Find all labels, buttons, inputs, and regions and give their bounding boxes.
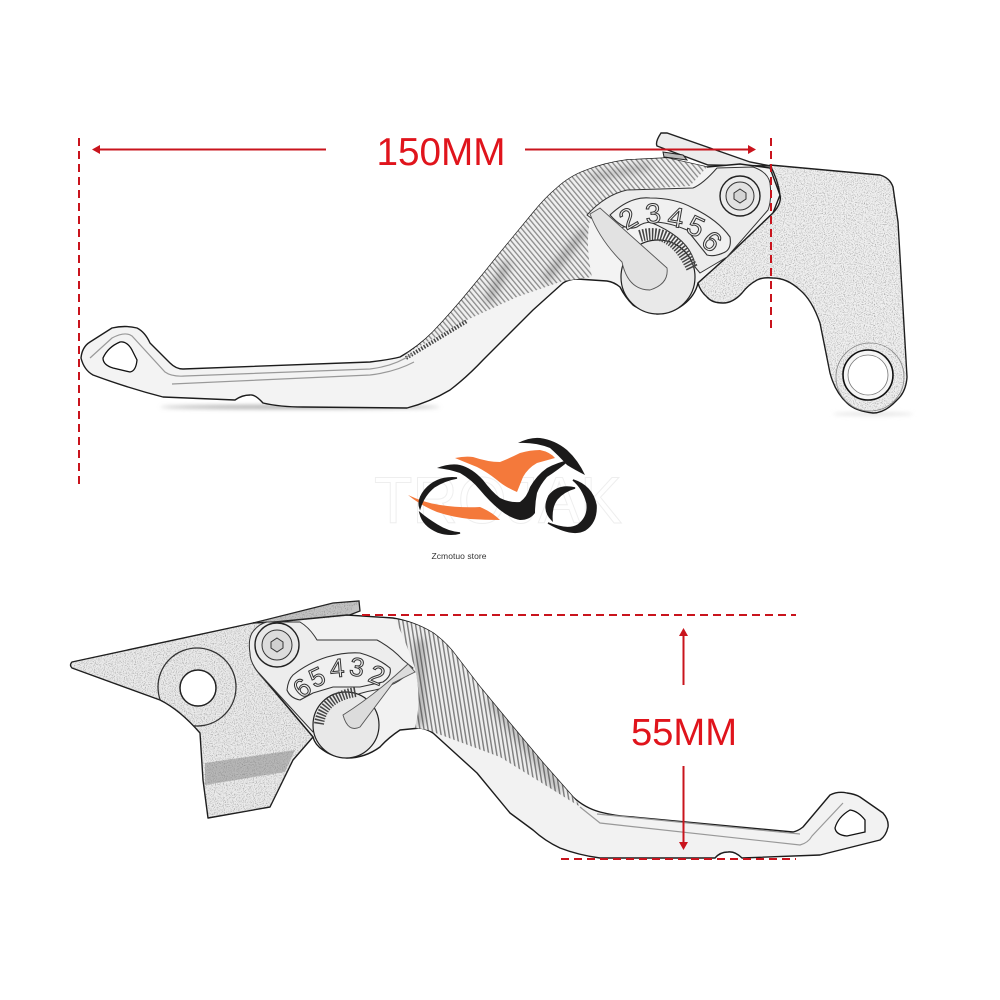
- watermark wordmark: TROJAK: [374, 463, 622, 537]
- left arrow: [92, 145, 326, 154]
- shading: bottom hatch: [420, 640, 560, 790]
- pivot boss: bottom lever: [158, 648, 236, 726]
- shading: top hatch: [488, 166, 650, 302]
- hex bolt: top lever: [720, 176, 760, 216]
- scale numbers: bottom lever: 5: [304, 660, 330, 694]
- bottom extent line: [561, 858, 796, 860]
- scale numbers: top lever: [614, 197, 728, 258]
- down arrow: [679, 766, 688, 850]
- motorcycle frame swoosh: black: [437, 460, 570, 520]
- scale numbers: top lever: 2: [614, 201, 643, 236]
- dimension: 150MM length: [79, 131, 771, 487]
- motorcycle tank: orange: [455, 450, 555, 492]
- top brake lever: [81, 133, 915, 420]
- finger hole: top lever: [103, 342, 137, 372]
- scale numbers: top lever: 6: [696, 225, 728, 258]
- scale numbers: bottom lever: 2: [365, 658, 389, 692]
- grooves: top lever handle: [90, 334, 414, 384]
- spring clip: top lever: [663, 152, 687, 160]
- up arrow: [679, 628, 688, 685]
- adjuster knob: bottom lever: [313, 664, 415, 758]
- mount arm: top lever: [698, 165, 907, 413]
- ground shadow: top lever: [160, 405, 913, 416]
- lever body: top: [81, 158, 780, 408]
- store name: Zcmotuo store: [432, 551, 487, 561]
- scale numbers: top lever: 4: [666, 201, 686, 234]
- label: 150MM: 150MM: [376, 131, 506, 174]
- scale numbers: bottom lever: 4: [328, 652, 346, 684]
- pivot hole: top lever: [836, 343, 904, 411]
- scale numbers: bottom lever: 3: [347, 651, 367, 683]
- speckle: bottom arm: [65, 598, 365, 823]
- right arrow: [525, 145, 756, 154]
- scale numbers: bottom lever: [287, 651, 389, 704]
- top extent line: [362, 614, 796, 616]
- scale numbers: top lever: 3: [644, 197, 662, 230]
- hex bolt: bottom lever: [255, 623, 299, 667]
- grooves: bottom lever handle: [580, 803, 843, 845]
- hatched shoulder: top lever: [404, 158, 707, 355]
- adjuster plate: bottom lever: [249, 622, 413, 732]
- knurled edge: top lever: [406, 321, 467, 358]
- brand logo: [374, 438, 622, 561]
- adjuster tab: top lever: [656, 133, 771, 166]
- motorcycle windscreen arc: black: [518, 438, 585, 475]
- adjuster plate: top lever: [587, 167, 771, 273]
- motorcycle seat tail: orange: [408, 495, 500, 520]
- number window: top lever: [610, 198, 730, 256]
- rear wheel arcs: [419, 478, 460, 534]
- right extent line: [770, 138, 772, 332]
- dimension: 55MM height: [362, 615, 796, 859]
- number window: bottom lever: [287, 653, 390, 700]
- front wheel arcs: [546, 480, 596, 532]
- adjuster knob: top lever: [590, 208, 695, 314]
- worn band: bottom arm: [205, 750, 295, 785]
- speckle: top arm: [698, 166, 907, 413]
- scale numbers: bottom lever: 6: [287, 672, 317, 704]
- hatched shoulder: bottom lever: [395, 619, 582, 808]
- lever body: bottom: [250, 615, 888, 858]
- adjuster tab: bottom lever: [253, 601, 360, 623]
- left extent line: [78, 138, 80, 487]
- scale numbers: top lever: 5: [682, 209, 709, 244]
- mount arm: bottom lever: [70, 622, 313, 818]
- finger hole: bottom lever: [835, 810, 865, 836]
- bottom brake lever: [65, 598, 888, 858]
- label: 55MM: 55MM: [631, 711, 737, 754]
